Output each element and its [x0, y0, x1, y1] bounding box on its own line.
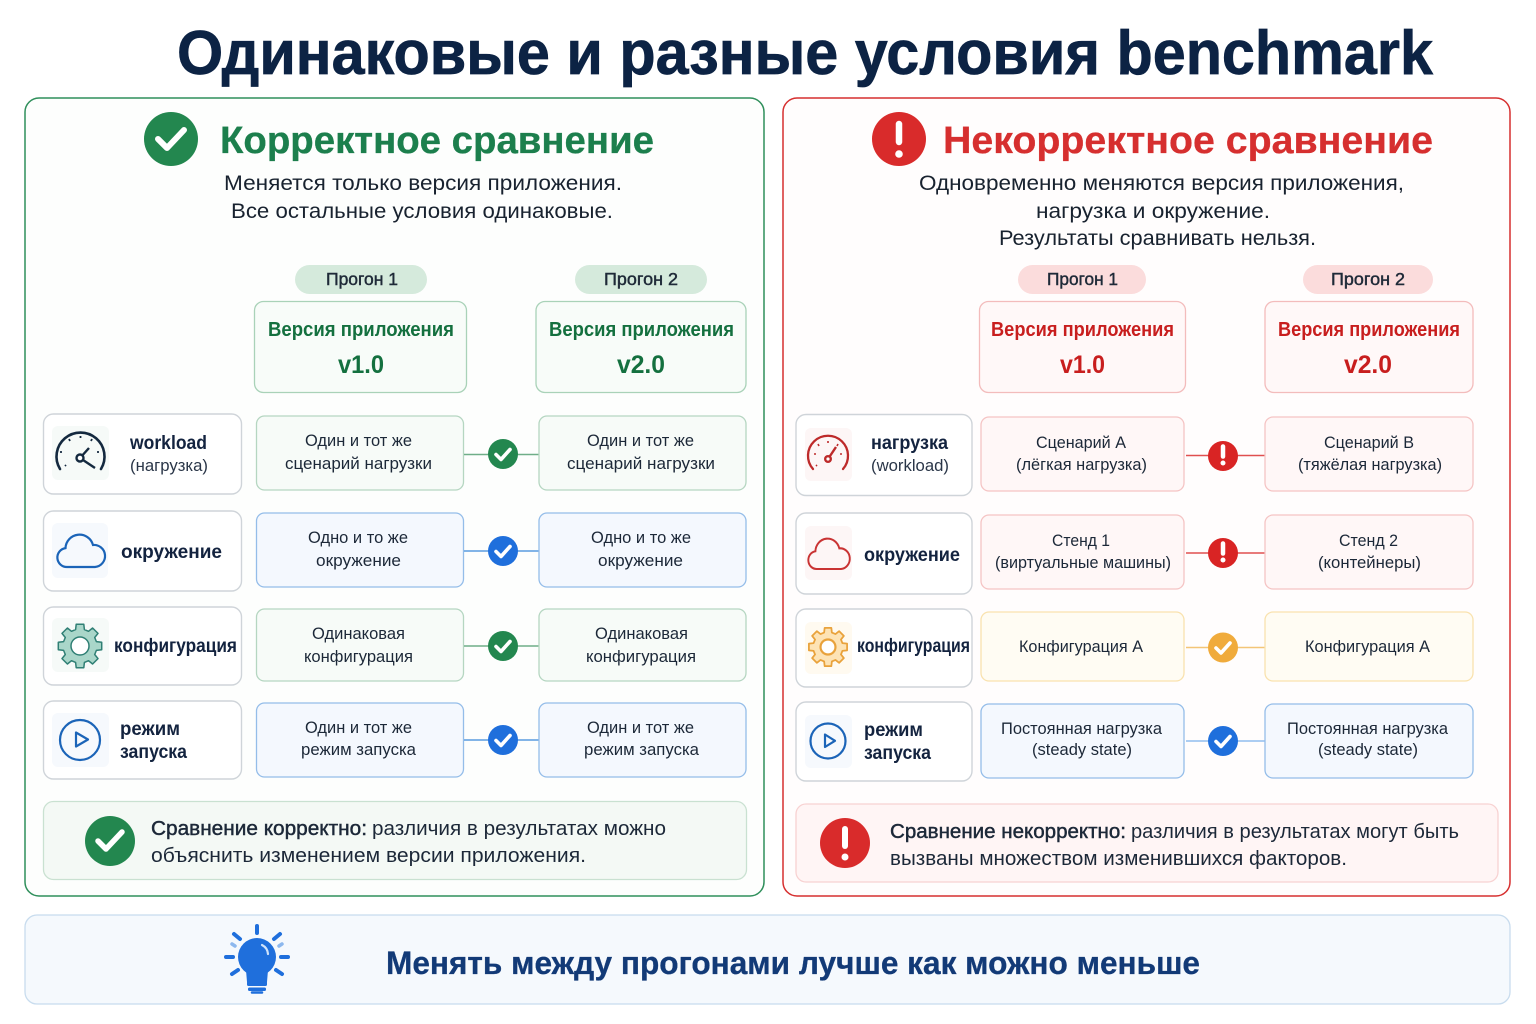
row: run mode run 1 value [981, 704, 1184, 778]
row: configuration run 2 value [1265, 612, 1473, 681]
row: configuration run 1 value: конфигурация [304, 647, 413, 666]
version box v2.0: v2.0 [617, 351, 665, 379]
row: run mode label [796, 702, 972, 781]
run 2 pill: Прогон 2 [1331, 269, 1405, 289]
icon: gear [58, 624, 102, 668]
icon: play [60, 720, 100, 760]
row: configuration label [796, 609, 972, 687]
icon: gear [809, 628, 847, 666]
run 2 pill [1303, 265, 1433, 294]
row: workload label: workload [129, 433, 207, 454]
heading: incorrect comparison: Некорректное сравнение [943, 120, 1433, 162]
row: environment label [796, 513, 972, 594]
icon: cloud [57, 535, 105, 567]
row: workload status connector [464, 439, 539, 469]
description: Одновременно меняются версия приложения, [919, 171, 1404, 195]
icon: gauge [57, 433, 104, 469]
description: Результаты сравнивать нельзя. [999, 226, 1316, 250]
row: workload label [796, 414, 972, 496]
icon: light bulb [226, 926, 288, 992]
row: configuration status connector [1186, 632, 1265, 662]
icon: play [810, 724, 846, 758]
row: environment run 2 value [1265, 515, 1473, 589]
row: configuration run 2 value: Конфигурация А [1305, 637, 1431, 656]
row: run mode run 1 value [256, 703, 464, 777]
row: environment run 2 value [539, 513, 746, 587]
version box v1.0 [254, 302, 466, 392]
row: workload label: (workload) [871, 456, 949, 475]
row: environment status connector [1186, 538, 1265, 568]
callout: correct conclusion: объяснить изменением версии приложения. [151, 845, 586, 867]
description: Меняется только версия приложения. [224, 171, 622, 195]
title: Одинаковые и разные условия benchmark [177, 19, 1433, 88]
row: run mode run 1 value: режим запуска [301, 740, 417, 759]
row: configuration run 2 value [539, 609, 746, 681]
row: run mode run 2 value [539, 703, 746, 777]
row: workload run 1 value: Сценарий А [1036, 433, 1127, 452]
run 1 pill: Прогон 1 [326, 269, 398, 289]
version box v2.0: v2.0 [1344, 351, 1392, 379]
row: configuration label [44, 607, 242, 685]
callout: correct conclusion [44, 802, 746, 880]
row: workload run 2 value [1265, 417, 1473, 491]
row: workload run 2 value: (тяжёлая нагрузка) [1298, 455, 1442, 474]
heading: correct comparison: Корректное сравнение [220, 120, 654, 162]
row: environment label: окружение [864, 545, 960, 566]
row: run mode label [44, 701, 242, 779]
description [224, 171, 622, 223]
row: workload run 2 value: Один и тот же [587, 431, 694, 450]
description: Все остальные условия одинаковые. [231, 199, 613, 223]
icon: gauge [808, 436, 848, 469]
run 2 pill: Прогон 2 [604, 269, 678, 289]
icon: red exclamation [872, 112, 926, 166]
row: configuration status connector [464, 631, 539, 661]
version box v1.0: v1.0 [338, 351, 384, 379]
row: run mode run 2 value [1265, 704, 1473, 778]
banner: key takeaway [25, 915, 1510, 1004]
callout: incorrect conclusion: вызваны множеством изменившихся факторов. [890, 848, 1347, 870]
callout: incorrect conclusion [796, 804, 1498, 882]
row: environment run 1 value: Стенд 1 [1052, 531, 1110, 550]
row: configuration run 1 value: Конфигурация А [1019, 637, 1144, 656]
row: environment run 2 value: Стенд 2 [1339, 531, 1398, 550]
callout: incorrect conclusion: Сравнение некорректно: [890, 821, 1126, 843]
row: workload label: (нагрузка) [130, 456, 208, 475]
row: run mode run 1 value: Один и тот же [305, 718, 412, 737]
row: run mode label: запуска [864, 743, 931, 764]
row: workload run 1 value [256, 416, 464, 490]
row: environment label [44, 511, 242, 591]
row: configuration run 1 value [256, 609, 464, 681]
row: workload label: нагрузка [871, 433, 948, 454]
row: run mode run 2 value: (steady state) [1318, 740, 1418, 759]
row: environment run 1 value: Одно и то же [308, 528, 408, 547]
description: нагрузка и окружение. [1036, 199, 1270, 223]
row: environment run 1 value: окружение [316, 551, 401, 570]
row: configuration run 1 value: Одинаковая [312, 624, 405, 643]
version box v1.0: Версия приложения [991, 319, 1174, 341]
row: configuration run 2 value: конфигурация [586, 647, 696, 666]
row: workload run 1 value [981, 417, 1184, 491]
version box v1.0 [980, 302, 1186, 392]
panel: incorrect comparison [783, 98, 1510, 896]
icon: green check [144, 112, 198, 166]
panel: correct comparison [25, 98, 764, 896]
row: run mode status connector [464, 725, 539, 755]
row: run mode run 2 value: Постоянная нагрузка [1287, 719, 1449, 738]
callout: incorrect conclusion: различия в результатах могут быть [1131, 821, 1459, 843]
row: workload status connector [1186, 441, 1265, 471]
row: environment label: окружение [121, 542, 222, 563]
run 1 pill [295, 265, 427, 294]
version box v1.0: v1.0 [1060, 351, 1105, 379]
version box v1.0: Версия приложения [268, 319, 454, 341]
run 1 pill: Прогон 1 [1047, 269, 1118, 289]
row: environment run 1 value [981, 515, 1184, 589]
row: workload run 1 value: (лёгкая нагрузка) [1016, 455, 1147, 474]
description [919, 171, 1404, 250]
row: run mode label: запуска [120, 742, 187, 763]
row: run mode run 1 value: Постоянная нагрузка [1001, 719, 1163, 738]
row: workload run 2 value: Сценарий В [1324, 433, 1414, 452]
version box v2.0: Версия приложения [1278, 319, 1460, 341]
callout: correct conclusion: различия в результатах можно [372, 818, 666, 840]
row: run mode run 2 value: режим запуска [584, 740, 700, 759]
run 2 pill [575, 265, 707, 294]
row: run mode run 2 value: Один и тот же [587, 718, 694, 737]
row: configuration run 2 value: Одинаковая [595, 624, 688, 643]
row: environment run 1 value: (виртуальные машины) [995, 553, 1171, 572]
version box v2.0: Версия приложения [549, 319, 734, 341]
row: workload run 2 value: сценарий нагрузки [567, 454, 715, 473]
row: workload run 1 value: сценарий нагрузки [285, 454, 432, 473]
row: environment status connector [464, 536, 539, 566]
row: workload label [44, 414, 242, 494]
row: environment run 2 value: (контейнеры) [1318, 553, 1421, 572]
run 1 pill [1018, 265, 1146, 294]
callout: correct conclusion: Сравнение корректно: [151, 818, 367, 840]
row: environment run 1 value [256, 513, 464, 587]
row: run mode label: режим [864, 720, 923, 741]
row: run mode run 1 value: (steady state) [1032, 740, 1132, 759]
icon: cloud [808, 539, 850, 569]
row: environment run 2 value: Одно и то же [591, 528, 691, 547]
row: run mode label: режим [120, 719, 180, 740]
row: workload run 1 value: Один и тот же [305, 431, 412, 450]
row: workload run 2 value [539, 416, 746, 490]
row: configuration label: конфигурация [857, 636, 970, 657]
row: configuration label: конфигурация [114, 636, 237, 657]
row: configuration run 1 value [981, 612, 1184, 681]
version box v2.0 [536, 302, 746, 392]
takeaway text: Менять между прогонами лучше как можно меньше [386, 945, 1200, 981]
row: run mode status connector [1186, 726, 1265, 756]
row: environment run 2 value: окружение [598, 551, 683, 570]
version box v2.0 [1265, 302, 1473, 392]
